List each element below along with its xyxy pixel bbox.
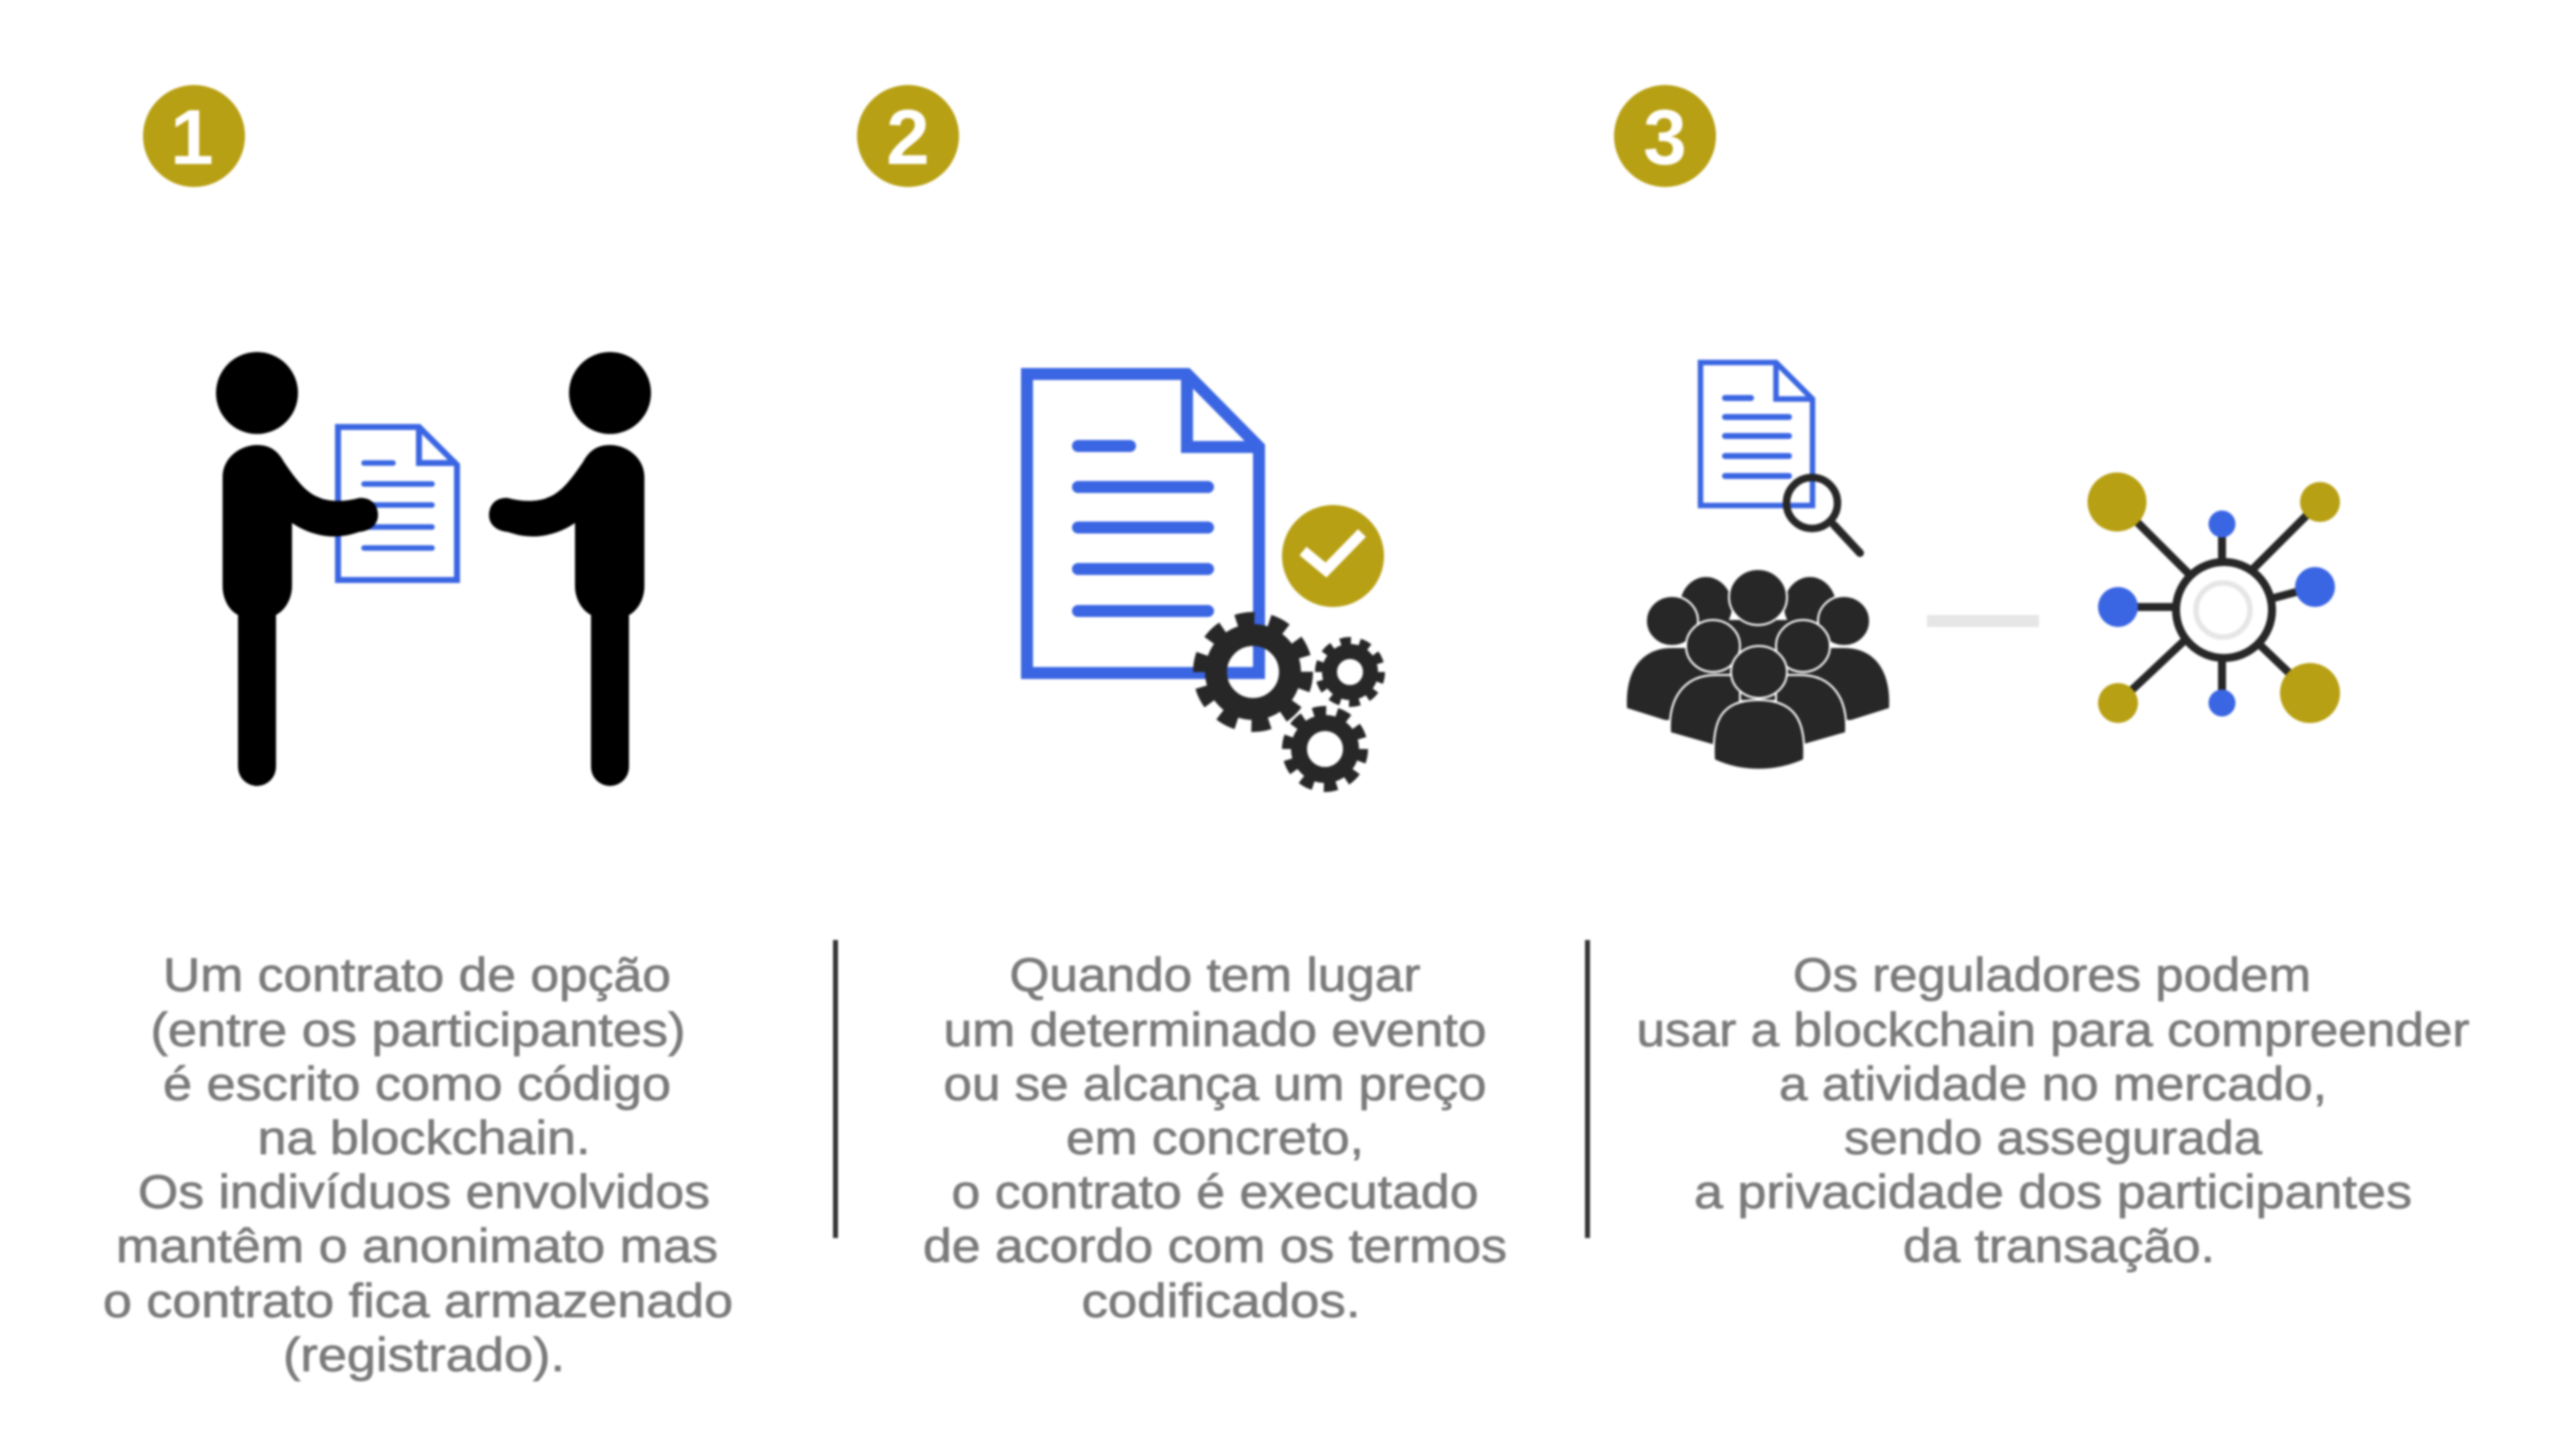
text block: step 1: é escrito como código: [163, 1057, 671, 1110]
icon: medium gear: [1287, 711, 1363, 787]
text block: step 1: Os indivíduos envolvidos: [138, 1165, 710, 1218]
text block: step 2: um determinado evento: [944, 1003, 1486, 1056]
text block: step 2: [923, 948, 1507, 1327]
icon: executed contract with check mark and gears: [1027, 374, 1384, 787]
text block: step 2: codificados.: [1082, 1274, 1360, 1327]
network blue nodes: [2098, 510, 2335, 716]
text block: step 2: ou se alcança um preço: [944, 1057, 1486, 1110]
text block: step 1: na blockchain.: [258, 1111, 590, 1164]
network connection lines: [2117, 502, 2320, 703]
text block: step 1: Um contrato de opção: [163, 948, 671, 1001]
icon: blockchain network: [2088, 472, 2340, 723]
text block: step 2: o contrato é executado: [952, 1165, 1478, 1218]
text block: step 1: mantêm o anonimato mas: [116, 1219, 718, 1272]
text block: step 3: a atividade no mercado,: [1779, 1057, 2327, 1110]
text block: step 3: a privacidade dos participantes: [1694, 1165, 2412, 1218]
icon: large gear: [1200, 619, 1306, 725]
number badge 1: 1: [170, 93, 214, 181]
number badge 2: 2: [886, 93, 930, 181]
divider between steps 2 and 3: [1585, 940, 1590, 1238]
text block: step 3: Os reguladores podem: [1793, 948, 2311, 1001]
number badge 3: [1614, 85, 1716, 187]
number badge 2: [857, 85, 959, 187]
text block: step 2: de acordo com os termos: [923, 1219, 1507, 1272]
text block: step 1: (registrado).: [283, 1328, 565, 1381]
network central hub: [2176, 562, 2272, 658]
icon: person on the left: [216, 352, 378, 786]
text block: step 3: sendo assegurada: [1844, 1111, 2263, 1164]
number badge 1: [143, 85, 245, 187]
icon: contract document held between people: [338, 427, 457, 580]
text block: step 2: Quando tem lugar: [1010, 948, 1420, 1001]
text block: step 3: [1636, 948, 2470, 1272]
text block: step 3: usar a blockchain para compreender: [1636, 1003, 2470, 1056]
icon: two people exchanging a contract: [216, 352, 651, 786]
icon: large contract document: [1027, 374, 1259, 673]
network gold nodes: [2088, 472, 2340, 723]
connector dash: [1927, 615, 2039, 627]
icon: document under magnifying glass: [1700, 362, 1860, 553]
icon: crowd of regulators: [1627, 569, 1889, 770]
text block: step 1: o contrato fica armazenado: [103, 1274, 733, 1327]
icon: magnifying glass: [1786, 478, 1860, 553]
text block: step 1: [103, 948, 733, 1381]
text block: step 3: da transação.: [1903, 1219, 2215, 1272]
number badge 3: 3: [1643, 93, 1687, 181]
text block: step 1: (entre os participantes): [150, 1003, 686, 1056]
icon: person on the right: [489, 352, 651, 786]
text block: step 2: em concreto,: [1066, 1111, 1364, 1164]
icon: small gear: [1319, 641, 1381, 703]
divider between steps 1 and 2: [833, 940, 838, 1238]
icon: gold check mark badge: [1282, 505, 1384, 607]
